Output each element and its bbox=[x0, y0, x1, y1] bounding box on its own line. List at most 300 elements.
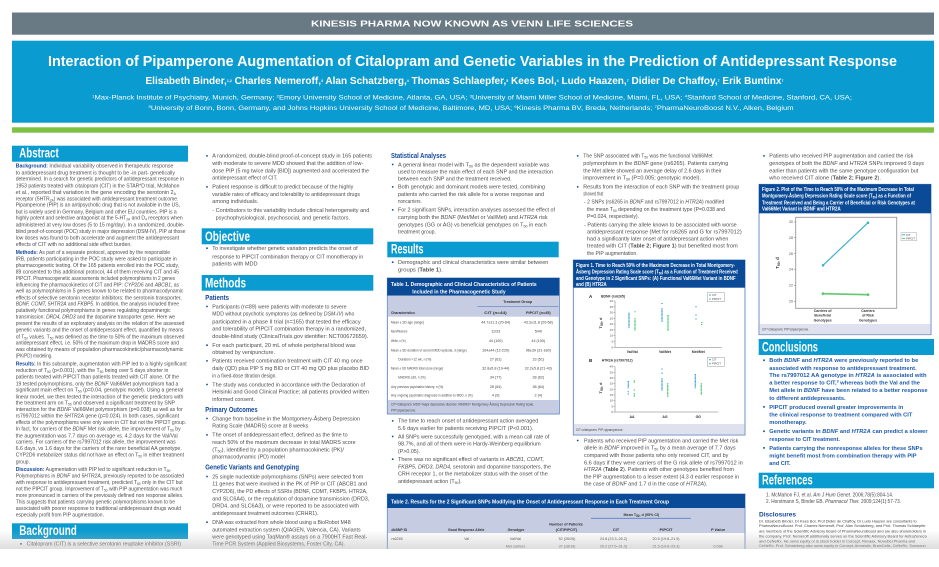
chart B: HTR2A scatter: 0 bbox=[611, 410, 613, 414]
results bullets below table 1: antidepressant action (T 50). bbox=[398, 479, 462, 485]
figure 2 title: Montgomery-Åsberg Depression Rating Scale score (T50) as a Function of bbox=[762, 193, 911, 200]
heading: conclusions: Conclusions bbox=[762, 338, 818, 354]
table 1 rows: 2 (4) bbox=[535, 393, 542, 397]
line chart: T50 by genotype carrier group: Carriers of bbox=[814, 309, 832, 313]
genotyping bullets: automated extraction system (QIAGEN, Valencia, CA). Variants bbox=[212, 527, 361, 533]
statistical analyses bullets: treatment group. bbox=[398, 230, 436, 236]
table 2 title: Table 2. Results for the 2 Significant SNPs Modifying the Onset of Antidepressant Response in Each Treatment Group bbox=[391, 500, 669, 506]
objective text: response to PIPCIT combination therapy or CIT monotherapy in bbox=[212, 254, 363, 260]
results bullets, fourth column: improvement in T 50 (P=0.005; genotypic model). bbox=[583, 176, 701, 182]
figure 1 title: and Genotype in 2 Significant SNPs: (A) Functional Val66Met Variant in BDNF bbox=[576, 276, 736, 282]
background bullets, second column: antidepressant effect of CIT. bbox=[212, 176, 278, 182]
abstract text: pharmacogenetic testing. Of the 165 patients enrolled into the POC study, bbox=[16, 263, 179, 269]
table 1 rows: Mean ± SD MADRS total score (range) bbox=[391, 367, 443, 371]
table 2 column heads: Number of Patients bbox=[549, 522, 584, 526]
table 1 title: Table 1. Demographic and Clinical Characteristics of Patients bbox=[391, 282, 537, 288]
conclusions bullets: and CIT. bbox=[769, 461, 791, 467]
heading: objective: Objective bbox=[205, 228, 250, 244]
results intro bullet bbox=[392, 260, 548, 273]
panel: disclosures bbox=[759, 511, 927, 548]
table 2 rows: Val/Val bbox=[510, 537, 521, 541]
statistical analyses bullets: carrying both the BDNF (Met/Met or Val/Met) and HTR2A risk bbox=[398, 215, 548, 221]
abstract text: BDNF, COMT, 5HTR2A and FKBP5. In addition, the analysis included three bbox=[16, 302, 179, 308]
results bullets, fourth column: P=0.024, respectively). bbox=[587, 214, 639, 220]
conclusions bullets: Patients carrying the nonresponse alleles for these SNPs bbox=[769, 446, 923, 452]
disclosure text: Dr. Elisabeth Binder, Dr Kees Bol, Prof Didier de Chaffoy, Dr Ludo Haazen are consultants to bbox=[759, 519, 917, 524]
background bullets, second column: A randomized, double-blind proof-of-concept study in 165 patients bbox=[212, 154, 372, 160]
line chart: T50 by genotype carrier group: Genotypes bbox=[814, 319, 832, 323]
patients bullets: Patients received combination treatment with CIT 40 mg once bbox=[212, 359, 363, 365]
subheading: primary outcomes: Primary Outcomes bbox=[205, 405, 258, 414]
chart A: BDNF scatter: 25 bbox=[610, 316, 613, 320]
line chart: T50 by genotype carrier group bbox=[775, 217, 917, 323]
results bullets, fourth column: the mean T50 depending on the treatment type (P=0.038 and bbox=[587, 207, 725, 213]
line chart: T50 by genotype carrier group: 20 bbox=[789, 300, 793, 304]
heading: abstract: Abstract bbox=[19, 145, 59, 161]
table 2 bbox=[387, 494, 745, 554]
figure 2 footnote: CIT=citalopram; PIP=pipamperone. bbox=[762, 328, 809, 332]
abstract text: not the PIPCIT group. Improvement of T50 with PIP augmentation was much bbox=[16, 487, 183, 493]
disclosure text: PharmaNeuroBoost. Prof. Charles Nemeroff, Prof. Alan Schatzberg, and Prof. Thomas Schlaepfer bbox=[759, 523, 926, 528]
abstract text: reduction of T50 (p<0.001), with the T50 being over 5 days shorter in bbox=[16, 368, 169, 374]
results bullets, fourth column: the Met allele showed an average delay of 2.6 days in their bbox=[583, 168, 722, 174]
statistical analyses bullets: noncarriers. bbox=[398, 199, 422, 205]
table 1 footnote bbox=[391, 401, 534, 412]
conclusions bullets: Both BDNF and HTR2A were previously reported to be bbox=[769, 358, 919, 364]
background bullets, first column: Citalopram (CIT) is a selective serotonin reuptake inhibitor (SSRI) bbox=[27, 542, 181, 548]
green divider band bbox=[12, 127, 934, 133]
statistical analyses bullets: patients who carried the risk allele for a worse response and bbox=[398, 192, 544, 198]
chart A legend: CIT bbox=[712, 293, 717, 297]
abstract text: interaction for the BDNF Val66Met polymorphism (p=0.038) as well as for bbox=[16, 407, 183, 413]
patients bullets: and tolerability of PIPCIT combination therapy in a randomized, bbox=[212, 327, 366, 333]
chart B: HTR2A scatter: 10 bbox=[610, 399, 613, 403]
table 1 column heads: CIT (n=44) bbox=[484, 310, 507, 315]
abstract text: effects of selective serotonin receptor inhibitors: the serotonin transporter, bbox=[16, 295, 182, 301]
statistical analyses bullets bbox=[392, 162, 556, 236]
results bullets below table 1: CRH receptor 1, or the metabolizer status with the onset of the bbox=[398, 472, 548, 478]
table 1 rows: Mean ± SD age (range) bbox=[391, 321, 424, 325]
abstract text: genetic variants and the onset of antidepressant effect, quantified by means bbox=[16, 328, 184, 334]
table 1 title: Included in the Pharmacogenetic Study bbox=[412, 289, 506, 295]
heading: conclusions bbox=[759, 338, 934, 355]
genotyping bullets: were genotyped using TaqMan® assays on a 7900HT Fast Real- bbox=[212, 534, 368, 541]
panel: references bbox=[759, 472, 934, 505]
abstract text: Pipamperone (PIP) is an antipsychotic drug that is not available in the US, bbox=[16, 203, 180, 209]
chart A legend: PIPCIT bbox=[712, 297, 721, 301]
primary outcomes bullets bbox=[206, 415, 360, 461]
table 1 rows: Any previous psychiatric history, n (%) bbox=[391, 385, 443, 389]
abstract text: effects of the polymorphisms were only seen in CIT but not the PIPCIT group. bbox=[16, 420, 186, 426]
abstract text: antidepressant effect, i.e. 50% of the maximum drop in MADRS score and bbox=[16, 341, 179, 347]
chart B: HTR2A scatter: 25 bbox=[610, 382, 613, 386]
abstract text: 6.6 days, vs 1.6 days for the carriers of the rarer beneficial AA genotype. bbox=[16, 446, 182, 452]
disclosure text: are members of the Scientific Advisory Board of PharmaNeuroBoost and are also shareholders in bbox=[759, 528, 926, 533]
abstract text: Polymorphisms in BDNF and 5HTR2A, previously reported to be associated bbox=[16, 474, 184, 480]
results bullets below table 1: There was no significant effect of variants in ABCB1, COMT, bbox=[398, 457, 544, 463]
abstract text: group. bbox=[16, 459, 30, 465]
disclosure text: the company. Prof. Nemeroff additionally serves on the Scientific Advisory Board for AstraZeneca bbox=[759, 533, 927, 538]
affiliations bbox=[92, 94, 852, 112]
results bullet, fifth column bbox=[763, 154, 924, 182]
abstract text: highly potent and selective antagonist at the 5-HT2A and D4 receptors when bbox=[16, 216, 183, 222]
genotyping bullets: DNA was extracted from whole blood using a BioRobot M48 bbox=[212, 520, 351, 526]
table 1 rows: 27 (61) bbox=[490, 357, 502, 361]
conclusions bullets: Met allele in BDNF have been related to a better response bbox=[769, 388, 928, 394]
table 2 rows: 52 (26/26) bbox=[559, 537, 575, 541]
panel: abstract bbox=[12, 145, 188, 519]
abstract text: CYP2D6 metabolizer status did not have an effect on T50 in either treatment bbox=[16, 453, 185, 459]
chart B: HTR2A scatter: AA bbox=[629, 415, 635, 419]
background bullets, second column: dose PIP (5 mg twice daily [BID]) augmented and accelerated the bbox=[212, 168, 369, 174]
subheading: patients: Patients bbox=[205, 293, 229, 302]
abstract text: the augmentation was 7.7 days on average vs. 4.2 days for the Val/Val bbox=[16, 433, 178, 439]
chart B: HTR2A scatter: T50, d bbox=[598, 382, 604, 393]
conclusions bullets: to different antidepressants. bbox=[769, 396, 846, 402]
figure 2 bbox=[759, 184, 931, 335]
heading: background bbox=[12, 522, 188, 539]
patients bullets: obtained by venipuncture. bbox=[212, 350, 275, 356]
chart B legend: PIPCIT bbox=[712, 362, 721, 366]
table 1 rows: Duration >12 wk, n (%) bbox=[398, 357, 431, 361]
statistical analyses bullets: For 2 significant SNPs, interaction analyses assessed the effect of bbox=[398, 208, 556, 214]
line chart: T50 by genotype carrier group: 28 bbox=[789, 236, 793, 240]
table 1 column heads bbox=[391, 299, 551, 315]
patients bullets: MDD without psychotic symptoms (as defined by DSM-IV) who bbox=[212, 312, 354, 318]
patients bullets: in a fixed-dose titration design. bbox=[212, 373, 277, 379]
abstract text: Background: Individual variability observed in therapeutic response bbox=[16, 164, 174, 170]
chart A: BDNF scatter: T50, d bbox=[598, 317, 604, 328]
genotyping bullets bbox=[206, 474, 369, 548]
results bullet below figure 1: 6.6 days if they were carriers of the G risk allele of rs7997012 in bbox=[584, 460, 743, 466]
figure 1 title: Åsberg Depression Rating Scale score (T50) as a Function of Treatment Received bbox=[576, 269, 738, 276]
abstract text: associated with poorer response to traditional antidepressant drugs would bbox=[16, 506, 181, 512]
heading: methods: Methods bbox=[205, 274, 246, 290]
results bullets, fourth column: The SNP associated with T50 was the functional Val66Met bbox=[583, 154, 713, 160]
subheading: statistical analyses: Statistical Analyses bbox=[391, 151, 446, 160]
heading: background: Background bbox=[19, 522, 77, 538]
table 1 rows: 38 (84) bbox=[532, 385, 544, 389]
results bullets, fourth column: - Patients carrying the allele known to be associated with worse bbox=[584, 222, 737, 228]
chart A: BDNF scatter: 40 bbox=[610, 299, 613, 303]
figure 1 title bbox=[576, 263, 738, 288]
patients bullets: Helsinki and Good Clinical Practice; all patients provided written bbox=[212, 390, 369, 396]
panel: results bbox=[387, 154, 924, 554]
results intro bullet: Demographic and clinical characteristics were similar between bbox=[398, 260, 548, 266]
table 2 rows: 37 (18/19) bbox=[559, 545, 575, 549]
patients bullets: double-blind study (ClinicalTrials.gov identifier: NCT00672659). bbox=[212, 334, 368, 340]
conclusions bullets: might benefit most from combination therapy with PIP bbox=[769, 454, 917, 460]
results bullet, fifth column: who received CIT alone ( Table 2; Figure 2 ). bbox=[769, 176, 881, 182]
genotyping bullets: DRD4, and SLC6A3), or were reported to be associated with bbox=[212, 504, 359, 510]
abstract text: administered at very low doses (5 to 15 mg/day). In a randomized, double- bbox=[16, 222, 185, 228]
table 1 rows: 43.3±11.8 (20-68) bbox=[524, 321, 553, 325]
table 1 footnote: CIT=citalopram; MDD=major depressive disorder; MADRS= Montgomery Åsberg Depression Rating Scale, bbox=[391, 401, 534, 406]
abstract text: patients treated with PIPCIT than patients treated with CIT alone. Of the bbox=[16, 375, 179, 381]
patients bullets: daily (QD) plus PIP 5 mg BID or CIT 40 mg QD plus placebo BID bbox=[212, 366, 369, 372]
table 1 rows: 96±39 (31-180) bbox=[526, 348, 551, 352]
background bullets, second column: - Contributors to this variability include clinical heterogeneity and bbox=[212, 208, 369, 214]
table 1 rows: 28 (64) bbox=[490, 385, 502, 389]
abstract text: but is widely used in Germany, Belgium and other EU countries. PIP is a bbox=[16, 209, 177, 215]
figure 1 title: Figure 1. Time to Reach 50% of the Maximum Decrease in Total Montgomery- bbox=[576, 263, 735, 269]
background bullets, second column: psychophysiological, psychosocial, and genetic factors. bbox=[216, 215, 350, 221]
abstract text: the treatment arm on T50 and observed a significant treatment by SNP bbox=[16, 401, 176, 407]
abstract text: (PK/PD) modeling. bbox=[16, 354, 52, 360]
chart B: HTR2A scatter: 35 bbox=[610, 370, 613, 374]
PIPCIT line bbox=[822, 292, 869, 296]
genotyping bullets: 11 genes that were involved in the PK of PIP or CIT (ABCB1 and bbox=[212, 482, 367, 488]
chart A: BDNF scatter: BDNF (rs6265) bbox=[601, 294, 626, 298]
primary outcomes bullets: The onset of antidepressant effect, defined as the time to bbox=[212, 433, 348, 439]
patients bullets bbox=[206, 304, 369, 403]
abstract text: 19 tested polymorphisms, only the BDNF Val66Met polymorphism had a bbox=[16, 381, 179, 387]
reference list bbox=[766, 492, 901, 505]
table 1 rows: 44 (100) bbox=[531, 339, 545, 343]
figure 2 title: Val66Met Variant in BDNF and HTR2A bbox=[762, 207, 841, 213]
background bullets, second column: variable rates of efficacy and tolerability to antidepressant drugs bbox=[212, 192, 360, 198]
table 2 rows: 0.038 bbox=[713, 545, 723, 549]
chart A: BDNF scatter: Val/Met bbox=[659, 350, 672, 354]
chart B: HTR2A scatter: 40 bbox=[610, 365, 613, 369]
CIT line bbox=[822, 221, 869, 267]
table 1 rows: Men/Women bbox=[391, 330, 407, 334]
results bullets below table 1: (P>0.05). bbox=[398, 449, 420, 455]
conclusions bullets: PIPCIT produced overall greater improvements in bbox=[769, 405, 904, 411]
table 1 rows: 44 (100) bbox=[489, 339, 503, 343]
results bullet below figure 1: allele in BDNF improved in T 50 by a mean average of 7.7 days bbox=[584, 446, 736, 452]
chart B: HTR2A scatter: 5 bbox=[611, 404, 613, 408]
patients bullets: informed consent. bbox=[212, 397, 255, 403]
disclosure text bbox=[759, 519, 927, 548]
abstract text: blind proof-of-concept (POC) study in major depression (DSM-IV), PIP at those bbox=[16, 229, 186, 235]
genotyping bullets: and SLC6A4), or the regulation of dopamine transmission (DRD3, bbox=[212, 496, 369, 502]
results bullets below table 1: The time to reach onset of antidepressant action averaged bbox=[398, 419, 538, 425]
patients bullets: Participants (n=89) were patients with moderate to severe bbox=[212, 304, 347, 310]
heading: references: References bbox=[762, 472, 813, 488]
abstract text: effects of CIT with no additional side effect burden. bbox=[16, 242, 132, 248]
conclusions bullets: the clinical response to treatment compared with CIT bbox=[769, 412, 913, 418]
conclusions bullets: Genetic variants in BDNF and HTR2A can predict a slower bbox=[769, 429, 928, 435]
chart B legend bbox=[707, 357, 724, 366]
conclusions bullets: a better response to CIT,3 whereas both the Val and the bbox=[769, 379, 921, 386]
figure 1 footnote: CIT=citalopram; PIP=pipamperone. bbox=[576, 428, 623, 432]
statistical analyses bullets: A general linear model with T 50 as the dependent variable was bbox=[398, 162, 550, 168]
table 1 rows: 32.8±5.8 (19-44) bbox=[482, 367, 509, 371]
abstract text: to antidepressant drug treatment is thought to be -in part- genetically bbox=[16, 170, 175, 176]
figure 1 bbox=[573, 260, 745, 435]
results bullet, fifth column: Patients who received PIP augmentation and carried the risk bbox=[769, 154, 914, 160]
table 1 rows: MADRS ≥30, n (%) bbox=[398, 376, 426, 380]
chart B: HTR2A scatter: 30 bbox=[610, 376, 613, 380]
results bullet below figure 1: Patients who received PIP augmentation and carried the Met risk bbox=[584, 438, 739, 444]
background bullets, second column: with moderate to severe MDD showed that the addition of low- bbox=[212, 161, 364, 167]
chart B: HTR2A scatter: 20 bbox=[610, 387, 613, 391]
chart B: HTR2A scatter: GG bbox=[696, 415, 701, 419]
table 1 footnote: PIP=pipamperone. bbox=[391, 408, 416, 412]
table 1 rows: 4 (9) bbox=[492, 393, 499, 397]
table 2 column heads: Genotype bbox=[508, 527, 525, 532]
abstract text: transmission: DRD4, DRD3 and the dopamine transporter gene. Here we bbox=[16, 315, 175, 321]
table 1 rows: 28 (62) bbox=[532, 376, 544, 380]
primary outcomes bullets: reach 50% of the maximum decrease in total MADRS score bbox=[212, 440, 356, 446]
abstract text: This suggests that patients carrying genetic polymorphisms known to be bbox=[16, 500, 175, 506]
results bullets below table 1: FKBP5, DRD3, DRD4, serotonin and dopamine transporters, the bbox=[398, 464, 551, 470]
abstract text: influencing the pharmacokinetics of CIT and PIP: CYP2D6 and ABCB1, as bbox=[16, 282, 179, 288]
abstract text: present the results of an exploratory analysis on the relation of the assessed bbox=[16, 321, 184, 327]
abstract text: determined. In a search for genetic predictors of antidepressant response in bbox=[16, 177, 184, 183]
results bullets, fourth column bbox=[577, 154, 742, 257]
chart A: BDNF scatter: 30 bbox=[610, 311, 613, 315]
background bullets, second column bbox=[206, 154, 372, 221]
table 2 rows: 24.8 (23.3–26.2) bbox=[600, 537, 627, 541]
conclusions bullets: monotherapy. bbox=[769, 420, 807, 426]
reference list: 2. Horstmann S, Binder EB. Pharmacol Ther. 2009;124(1):57-73. bbox=[766, 499, 901, 505]
table 2 column heads: (CIT/PIPCIT) bbox=[556, 527, 578, 532]
results bullet below figure 1: the PIP augmentation to a lesser extent (4.3 d earlier response in bbox=[584, 474, 739, 480]
objective text: patients with MDD bbox=[212, 262, 258, 268]
table 2 column heads: P Value bbox=[711, 527, 726, 532]
table 1 column heads: Characteristics bbox=[391, 310, 416, 315]
primary outcomes bullets: pharmacodynamic (PD) model bbox=[212, 455, 285, 461]
line chart legend bbox=[901, 233, 917, 241]
line chart: T50 by genotype carrier group: 22 bbox=[789, 284, 793, 288]
table 1 rows: 34 (77) bbox=[490, 376, 502, 380]
table 2 rows: 21.5 (19.8–23.3) bbox=[652, 545, 680, 549]
results bullet below figure 1 bbox=[577, 438, 743, 488]
abstract text: 1953 patients treated with citalopram (CIT) in the STAR*D trial, McMahon bbox=[16, 183, 180, 189]
background bullets, second column: Patient response is difficult to predict because of the highly bbox=[212, 185, 354, 191]
table 2 rows: Met carriers bbox=[506, 545, 525, 549]
heading: results bbox=[387, 240, 559, 257]
patients bullets: participated in a phase II trial (n=165) that tested the efficacy bbox=[212, 319, 361, 325]
chart B: HTR2A scatter: AG bbox=[662, 415, 668, 419]
objective text: To investigate whether genetic variation predicts the onset of bbox=[212, 246, 358, 252]
heading: results: Results bbox=[391, 240, 424, 256]
heading: references bbox=[759, 472, 934, 488]
results bullet, fifth column: genotypes of both the BDNF and HTR2A SNPs improved 9 days bbox=[769, 161, 924, 167]
figure 2 title bbox=[762, 187, 915, 213]
line chart legend: PIPCIT bbox=[906, 236, 915, 240]
line chart legend: CIT bbox=[906, 233, 911, 237]
abstract text bbox=[16, 164, 187, 519]
chart A: BDNF scatter: Met/Met bbox=[692, 350, 706, 354]
panel: objective bbox=[202, 228, 373, 268]
chart A: BDNF scatter: A bbox=[589, 294, 593, 299]
patients bullets: For each participant, 20 mL of whole peripheral blood was bbox=[212, 343, 356, 349]
abstract text: 89 consented to this additional protocol, 44 of them receiving CIT and 45 bbox=[16, 269, 179, 275]
abstract text: putatively functional polymorphisms in genes regulating dopaminergic bbox=[16, 308, 171, 314]
chart B: HTR2A scatter: 15 bbox=[610, 393, 613, 397]
table 1 title bbox=[391, 282, 537, 295]
primary outcomes bullets: Change from baseline in the Montgomery-Åsberg Depression bbox=[212, 415, 360, 422]
line chart: T50 by genotype carrier group: Genotypes bbox=[859, 319, 877, 323]
table 2 rows: 29.2 (27.5–31.0) bbox=[600, 545, 627, 549]
results bullets, fourth column: showed that bbox=[583, 192, 604, 198]
results bullets, fourth column: had a significantly later onset of antidepressant action when bbox=[587, 237, 728, 243]
chart A: BDNF scatter: 5 bbox=[611, 340, 613, 344]
abstract text: In fact, for carriers of the BDNF Met risk allele, the improvement of T50 by bbox=[16, 427, 181, 433]
patients bullets: The study was conducted in accordance with the Declaration of bbox=[212, 382, 366, 388]
abstract text: especially profit from PIP augmentation. bbox=[16, 513, 104, 519]
table 1 rows: 32.2±5.8 (21-43) bbox=[525, 367, 552, 371]
abstract text: well as polymorphisms in 5 genes known to be related to pharmacodynamic bbox=[16, 289, 184, 295]
statistical analyses bullets: used to measure the main effect of each SNP and the interaction bbox=[398, 169, 553, 175]
table 2 column heads: dbSNP ID bbox=[391, 527, 407, 532]
results bullets below table 1 bbox=[392, 419, 551, 485]
line chart: T50 by genotype carrier group: 24 bbox=[789, 268, 793, 272]
abstract text: rs7997012 within the 5HTR2A gene (p=0.024). In both cases, significant bbox=[16, 414, 180, 420]
banner: company name notice: KINESIS PHARMA NOW KNOWN AS VENN LIFE SCIENCES bbox=[311, 18, 634, 28]
authors: Elisabeth Binder,1,2 Charles Nemeroff,3 Alan Schatzberg,4 Thomas Schlaepfer,5 Kees Bol,6 Ludo Haazen,7 Didier De Chaffoy,7 Erik Buntinx7 bbox=[146, 76, 784, 87]
reference list: 1. McMahon FJ, et al. Am J Hum Genet. 2006;78(5):804-14. bbox=[766, 492, 893, 498]
results bullets, fourth column: polymorphism in the BDNF gene (rs6265). Patients carrying bbox=[583, 161, 728, 167]
chart A: BDNF scatter bbox=[589, 293, 724, 354]
table 2 column heads: CIT bbox=[613, 527, 620, 532]
abstract text: of T50 values. T50 was defined as the time to 50% of the maximum observed bbox=[16, 334, 185, 340]
table 1 rows: 5/40 bbox=[535, 330, 542, 334]
chart B: HTR2A scatter: B bbox=[589, 358, 593, 363]
abstract text: receptor (5HTR2A) was associated with antidepressant treatment outcome. bbox=[16, 196, 178, 202]
table 2 column heads: Mean T50, d (95% CI) bbox=[624, 512, 660, 518]
abstract text: Methods: As part of a separate protocol, approved by the responsible bbox=[16, 250, 170, 256]
abstract text: IRB, patients participating in the POC study were asked to participate in bbox=[16, 256, 177, 262]
abstract text: was obtained by means of population pharmacokinetic/pharmacodynamic bbox=[16, 347, 184, 353]
conclusions bullets: associated with response to antidepressant treatment. bbox=[769, 366, 917, 372]
results bullets, fourth column: treated with CIT ( Table 2; Figure 1 ) but benefited most from bbox=[587, 244, 738, 250]
chart A: BDNF scatter: Val/Val bbox=[627, 350, 638, 354]
statistical analyses bullets: between each SNP and the treatment received. bbox=[398, 176, 512, 182]
table 2 rows: rs6265 bbox=[391, 537, 403, 541]
abstract text: low doses was found to both accelerate and augment the antidepressant bbox=[16, 235, 180, 241]
chart A: BDNF scatter: 20 bbox=[610, 322, 613, 326]
line chart: T50 by genotype carrier group: 26 bbox=[789, 252, 793, 256]
table 2 column heads: Good Response Allele bbox=[448, 527, 485, 532]
statistical analyses bullets: genotypes (GG or AG) vs beneficial genotypes on T 50 in each bbox=[398, 222, 547, 228]
genotyping bullets: CYP2D6), the PD effects of SSRIs (BDNF, COMT, FKBP5, HTR2A, bbox=[212, 489, 368, 495]
abstract text: et al., reported that variation in the gene encoding the serotonin 2 A bbox=[16, 190, 177, 196]
heading: disclosures: Disclosures bbox=[759, 511, 796, 518]
genotyping bullets: 25 single nucleotide polymorphisms (SNPs) were selected from bbox=[212, 474, 363, 480]
results bullets below table 1: 5.6 days earlier for patients receiving PIPCIT (P<0.001). bbox=[398, 426, 533, 432]
subheading: genetic variants and genotyping: Genetic Variants and Genotyping bbox=[205, 463, 299, 472]
genotyping bullets: antidepressant treatment outcomes (CRHR1). bbox=[212, 511, 318, 517]
primary outcomes bullets: (T50), identified by a population pharmacokinetic (PK)/ bbox=[212, 447, 345, 453]
line chart: T50 by genotype carrier group: Carriers bbox=[861, 309, 875, 313]
table 2 column heads: PIPCIT bbox=[660, 527, 673, 532]
results bullets, fourth column: antidepressant response (Met for rs6265 and G for rs7997012) bbox=[587, 229, 742, 235]
line chart: T50 by genotype carrier group: T50, d bbox=[775, 257, 781, 269]
table 1 bbox=[387, 278, 559, 414]
results intro bullet: groups ( Table 1 ). bbox=[398, 267, 443, 273]
panel: background bbox=[12, 154, 372, 548]
chart B: HTR2A scatter bbox=[589, 357, 724, 419]
title panel bbox=[12, 41, 934, 123]
affiliations: 1Max-Planck Institute of Psychiatry, Munich, Germany; 2Emory University School of Medicine, Atlanta, GA, USA; 3University of Miami Miller School of Medicine, Miami, FL, USA; 4Stanford School of Medicine, Stanford, CA, USA; bbox=[92, 94, 852, 102]
statistical analyses bullets: Both genotypic and dominant models were tested, combining bbox=[398, 185, 545, 191]
abstract text: PIPCIT. Pharmacogenetic assessments included polymorphisms in 2 genes bbox=[16, 276, 175, 282]
results bullets, fourth column: - 2 SNPs (rs6265 in BDNF and rs7997012 in HTR2A) modified bbox=[584, 199, 724, 205]
figure 1 title: and (B) HTR2A bbox=[576, 282, 607, 288]
chart A: BDNF scatter: 15 bbox=[610, 328, 613, 332]
abstract text: linear model, we then tested the interaction of the genetic predictors with bbox=[16, 394, 184, 400]
conclusions bullets: The rs7997012 AA genotype in HTR2A is associated with bbox=[769, 373, 927, 379]
line chart: T50 by genotype carrier group: of Risk bbox=[862, 314, 874, 318]
conclusions bullets bbox=[763, 358, 928, 467]
results bullet, fifth column: earlier than patients with the same genotype configuration but bbox=[769, 168, 919, 174]
results bullets, fourth column: the PIP augmentation. bbox=[587, 251, 638, 257]
table 1 rows: 44.7±11.3 (20-64) bbox=[481, 321, 510, 325]
